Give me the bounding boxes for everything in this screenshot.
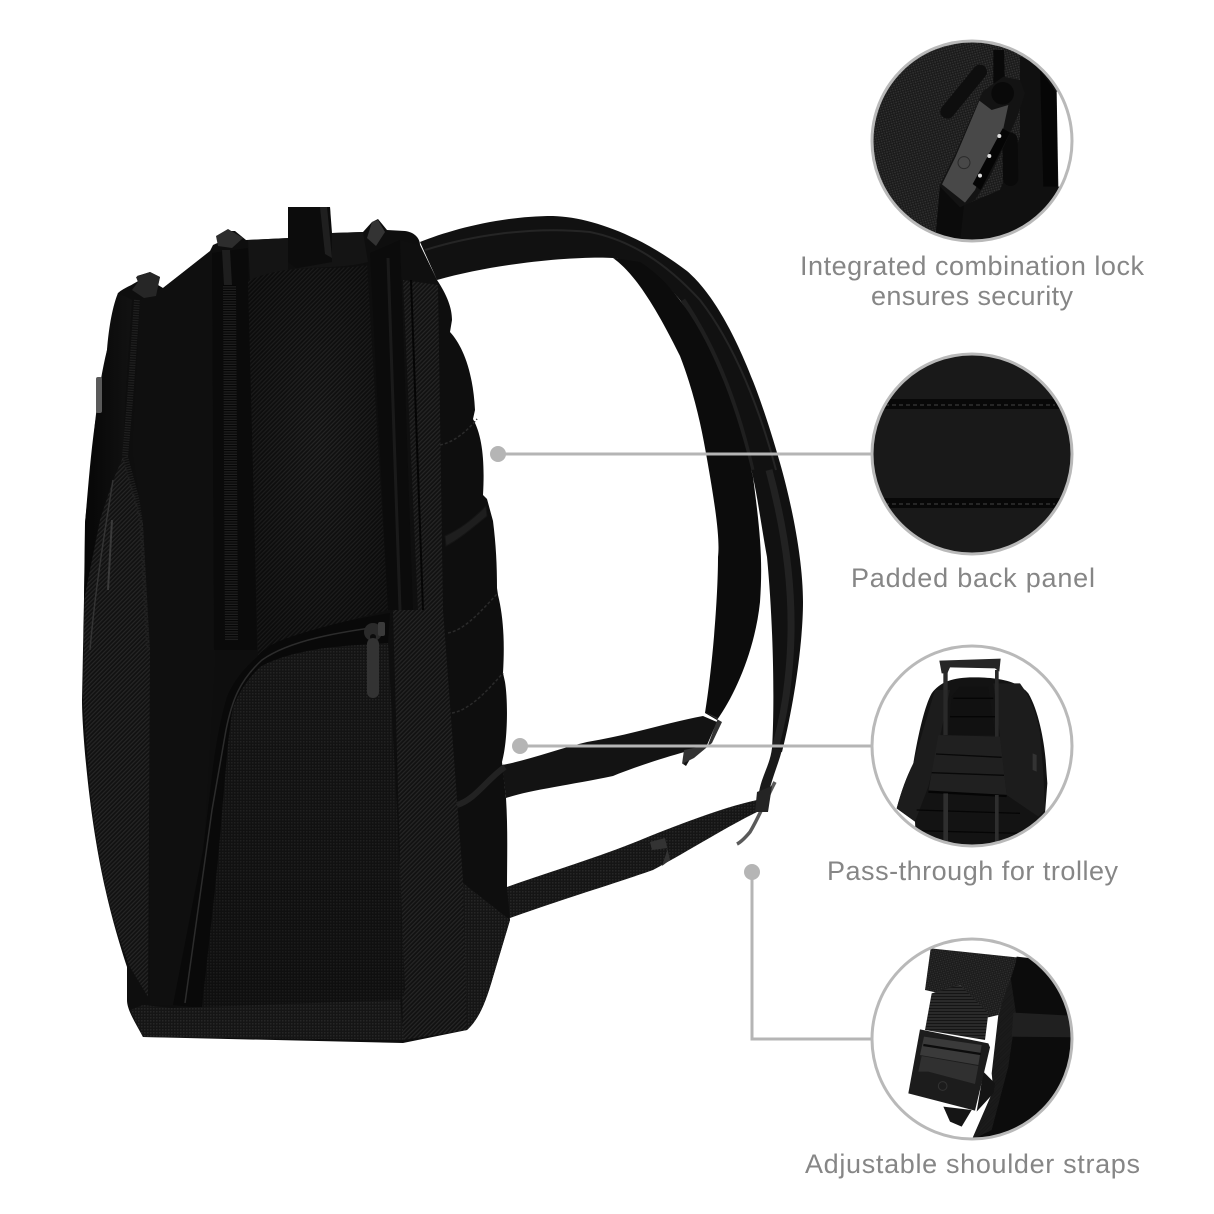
lower pocket bbox=[173, 613, 405, 1008]
metal buckle bbox=[737, 748, 782, 844]
label: combination lock: ensures security bbox=[871, 281, 1074, 311]
neoprene side panel bbox=[132, 250, 216, 1005]
back padding seams bbox=[440, 419, 505, 805]
connector: adjustable shoulder straps bbox=[744, 864, 872, 1039]
detail circle: lock bbox=[870, 40, 1077, 244]
top fabric section bbox=[248, 232, 368, 280]
lower strap two bbox=[480, 800, 757, 918]
front zipper bbox=[125, 300, 149, 650]
backpack side view bbox=[82, 207, 803, 1043]
front panel left band bbox=[83, 457, 150, 997]
front pocket slit bbox=[90, 480, 113, 650]
label: combination lock: Integrated combination lock bbox=[800, 251, 1144, 281]
detail circle: trolley bbox=[872, 646, 1072, 853]
central ballistic panel bbox=[248, 265, 388, 657]
USB port bbox=[96, 377, 102, 413]
lower strap one bbox=[502, 716, 717, 798]
shoulder strap inner pad bbox=[613, 258, 761, 720]
slider on lower strap bbox=[650, 838, 670, 866]
detail circle: buckle bbox=[872, 939, 1077, 1143]
carry handle bbox=[288, 207, 332, 268]
label: adjustable shoulder straps: Adjustable shoulder straps bbox=[805, 1149, 1140, 1179]
connector: padded back panel bbox=[490, 446, 872, 462]
body silhouette bbox=[82, 207, 510, 1043]
connector: pass-through for trolley bbox=[512, 738, 872, 754]
label: combination lock bbox=[800, 251, 1144, 311]
label: padded back panel: Padded back panel bbox=[851, 563, 1095, 593]
main zipper band bbox=[212, 229, 257, 650]
shoulder strap outer bbox=[420, 216, 803, 752]
callout: adjustable straps bbox=[805, 939, 1140, 1179]
right zipper band bbox=[370, 240, 443, 610]
bottom band bbox=[130, 1000, 404, 1040]
detail circle: padding bbox=[870, 352, 1074, 556]
label: pass-through for trolley: Pass-through for trolley bbox=[827, 856, 1118, 886]
callout: combination lock bbox=[800, 40, 1144, 311]
strap buckle upper bbox=[682, 712, 722, 764]
callout: trolley pass-through bbox=[827, 646, 1118, 886]
lower right flap bbox=[463, 883, 510, 1030]
zipper pulls on top bbox=[132, 220, 385, 298]
lower side panel bbox=[393, 610, 467, 1040]
pocket zip pull bbox=[364, 622, 385, 698]
callout: padded back panel bbox=[851, 352, 1095, 593]
